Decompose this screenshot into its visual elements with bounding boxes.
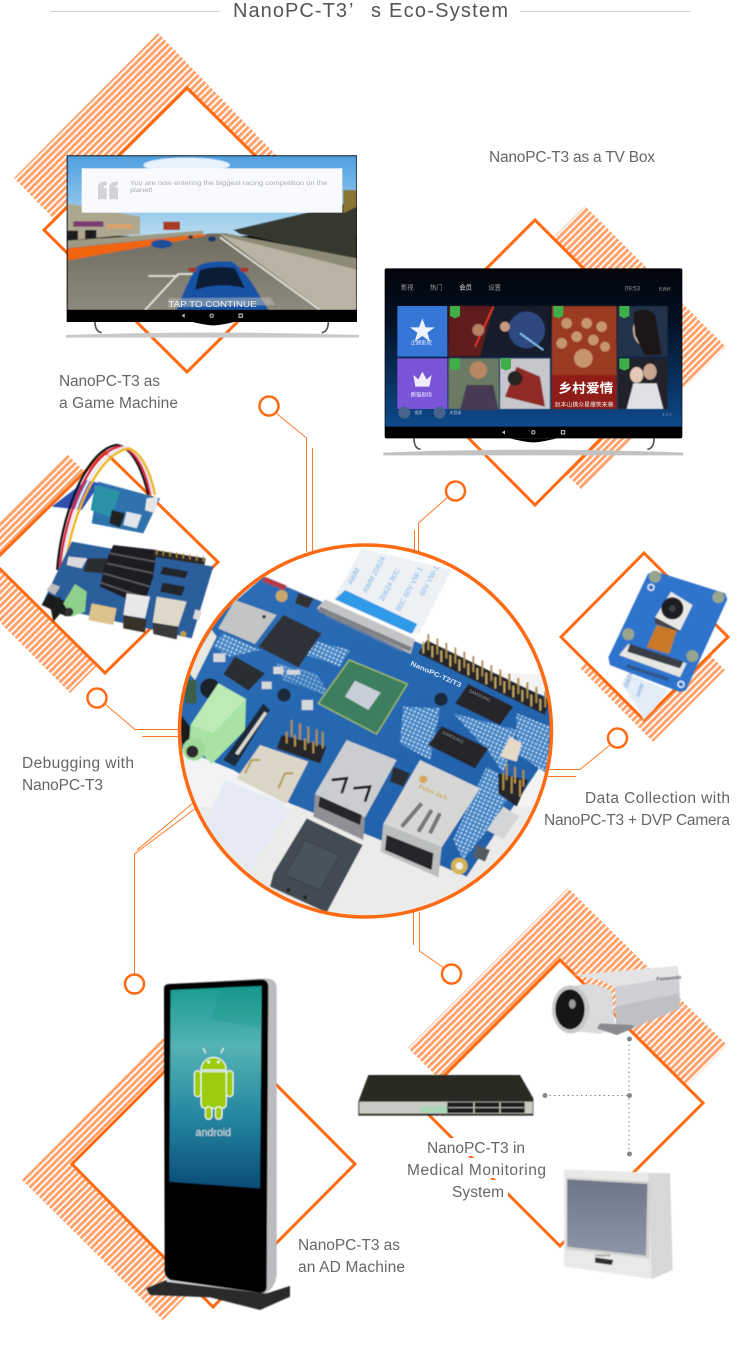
title: NanoPC-T3: [233, 0, 347, 22]
dotted network lines: [542, 1036, 632, 1156]
panel: TV box screen: 设置: [488, 282, 501, 291]
connector: medical: [414, 912, 461, 984]
label: data collection: NanoPC-T3 + DVP Camera: [544, 812, 730, 829]
diamond: debugging: [0, 452, 218, 673]
panel: NanoPC-T3 board circle: 80C 60V VW-1: [394, 565, 425, 613]
title: s Eco-System: [371, 0, 508, 22]
panel: TV box screen: 企鹅影院: [411, 338, 433, 346]
panel: NanoPC-T3 board circle: NanoPC-T2/T3: [409, 660, 463, 689]
panel: NanoPC-T3 board circle: 60V VW-1: [417, 564, 441, 598]
photo: AD kiosk: [146, 978, 290, 1310]
label: AD machine: an AD Machine: [298, 1259, 405, 1276]
connector: debugging: [88, 688, 182, 736]
diamond: camera: [561, 553, 728, 720]
icon: CRT monitor: Panasonic: [595, 1254, 611, 1258]
diamond: game machine: [44, 88, 330, 372]
icon: security camera: [552, 966, 682, 1035]
panel: TV box screen: 赵本山携众星爆笑来袭: [555, 401, 614, 409]
label: game machine: a Game Machine: [59, 395, 178, 412]
stripes: game machine: [14, 33, 277, 300]
panel: NanoPC-T3 board circle: AWM: [345, 566, 362, 586]
label: data collection: Data Collection with: [585, 790, 730, 807]
panel: TV box screen: 影视: [401, 282, 414, 291]
label: medical monitoring: Medical Monitoring: [407, 1162, 546, 1179]
photo: DVP camera module: [608, 571, 727, 720]
panel: NanoPC-T3 board circle: [170, 540, 570, 940]
label: debugging: [22, 755, 134, 794]
label: game machine: NanoPC-T3 as: [59, 373, 160, 390]
connector: camera: [548, 728, 627, 776]
panel: NanoPC-T3 board circle: 20624 80C: [377, 566, 402, 603]
panel: game machine TV: TAP TO CONTINUE: [168, 299, 257, 309]
panel: TV box screen: 鹏猫剧场: [411, 390, 432, 398]
panel: TV box screen: 09:53: [625, 287, 641, 293]
label: AD machine: NanoPC-T3 as: [298, 1237, 400, 1254]
panel: TV box screen: 4.0.2: [662, 412, 672, 417]
panel: game machine TV: You are now entering the biggest racing competition on the: [130, 180, 328, 187]
stripes: debugging: [0, 454, 187, 693]
panel: NanoPC-T3 board circle: SAMSUNG: [441, 730, 465, 745]
panel: TV box screen: 未登录: [449, 409, 461, 415]
panel: TV box screen: 搜索: [414, 409, 422, 415]
panel: TV box screen: 巴西杯: [659, 285, 671, 291]
diamond: AD machine: [72, 1022, 355, 1307]
photo: DVP camera module: AWM: [636, 683, 646, 698]
connector: TV box: [414, 482, 465, 552]
stripes: medical: [408, 888, 727, 1206]
label: medical monitoring: System: [452, 1184, 504, 1201]
label: medical monitoring: [405, 1138, 548, 1201]
panel: TV box screen: 热门: [430, 282, 443, 291]
title: ’: [349, 0, 353, 22]
stripes: camera: [580, 596, 725, 742]
panel: TV box screen: [383, 268, 683, 455]
panel: NanoPC-T3 board circle: Pulse Jack: [418, 784, 449, 802]
panel: TV box screen: 会员: [459, 282, 472, 291]
connector: AD machine: [125, 803, 196, 994]
icon: CRT monitor: [564, 1169, 673, 1279]
connector: game machine: [260, 396, 312, 552]
label: debugging: NanoPC-T3: [22, 777, 103, 794]
title: [50, 0, 690, 22]
photo: AD kiosk: android: [196, 1127, 231, 1139]
panel: game machine TV: planet!: [130, 187, 153, 194]
label: medical monitoring: NanoPC-T3 in: [427, 1140, 525, 1157]
photo: debugging boards: [42, 445, 213, 639]
icon: network switch: [358, 1075, 533, 1116]
diamond: medical: [417, 960, 703, 1246]
label: debugging: Debugging with: [22, 755, 134, 772]
stripes: AD machine: [22, 1038, 300, 1320]
label: game machine: [59, 373, 178, 412]
label: data collection: [544, 790, 730, 829]
diamond: TV box: [393, 220, 677, 505]
photo: DVP camera module: 20624: [624, 672, 635, 689]
panel: NanoPC-T3 board circle: SAMSUNG: [468, 688, 492, 703]
label: AD machine: [298, 1237, 405, 1276]
icon: security camera: Panasonic: [656, 974, 682, 983]
panel: game machine TV: [66, 155, 359, 338]
stripes: TV box: [441, 206, 726, 490]
panel: TV box screen: 乡村爱情: [558, 381, 614, 396]
panel: NanoPC-T3 board circle: AWM 20624: [360, 555, 387, 594]
label: TV box: NanoPC-T3 as a TV Box: [489, 149, 655, 166]
